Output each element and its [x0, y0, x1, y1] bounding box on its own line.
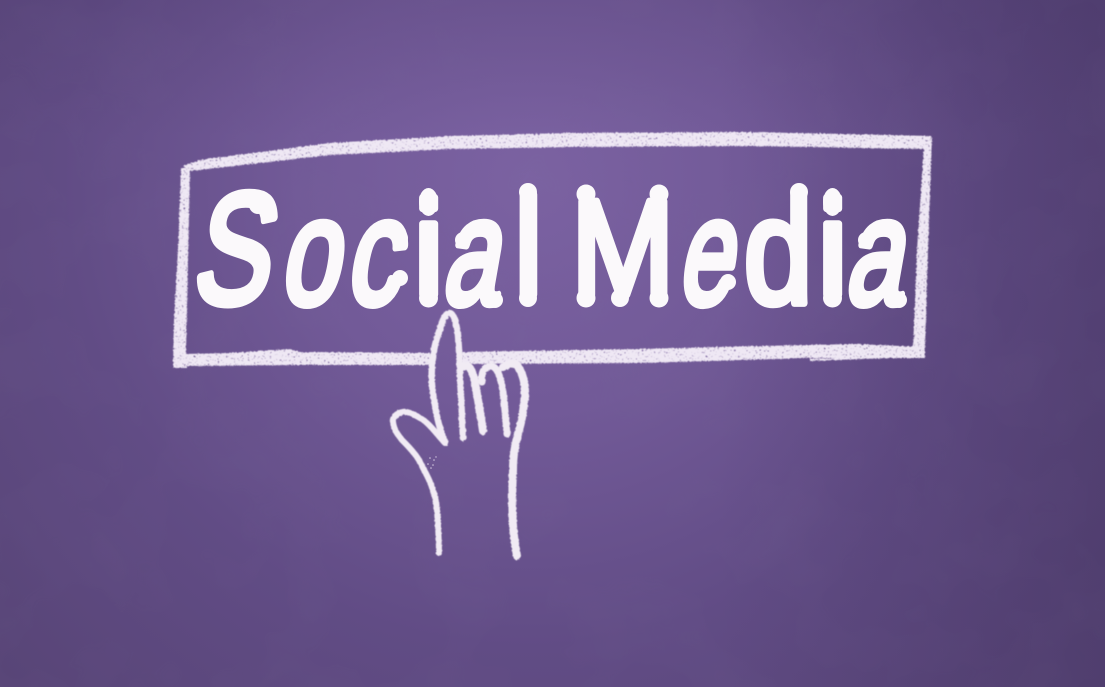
title letter o: o	[273, 168, 361, 336]
title letter a: a	[435, 169, 521, 336]
title letter M: M	[572, 173, 674, 324]
middle finger	[463, 366, 483, 431]
title letter i: i	[818, 173, 848, 323]
title letter e: e	[671, 168, 754, 335]
title letter l: l	[514, 170, 542, 324]
title letter d: d	[744, 168, 812, 336]
little finger and wrist	[503, 364, 525, 556]
title letter i: i	[414, 173, 444, 323]
title	[184, 161, 925, 337]
index finger	[432, 313, 463, 442]
title letter c: c	[339, 168, 422, 335]
title letter S: S	[184, 161, 292, 337]
rounded stroke ends of the lettering	[199, 183, 907, 308]
ring finger	[482, 366, 507, 434]
thumb and wrist	[393, 412, 445, 553]
chalk frame	[173, 132, 932, 368]
title letter a: a	[838, 169, 925, 336]
chalk specks by the hand	[427, 456, 437, 469]
icon: pointing hand	[393, 313, 525, 556]
